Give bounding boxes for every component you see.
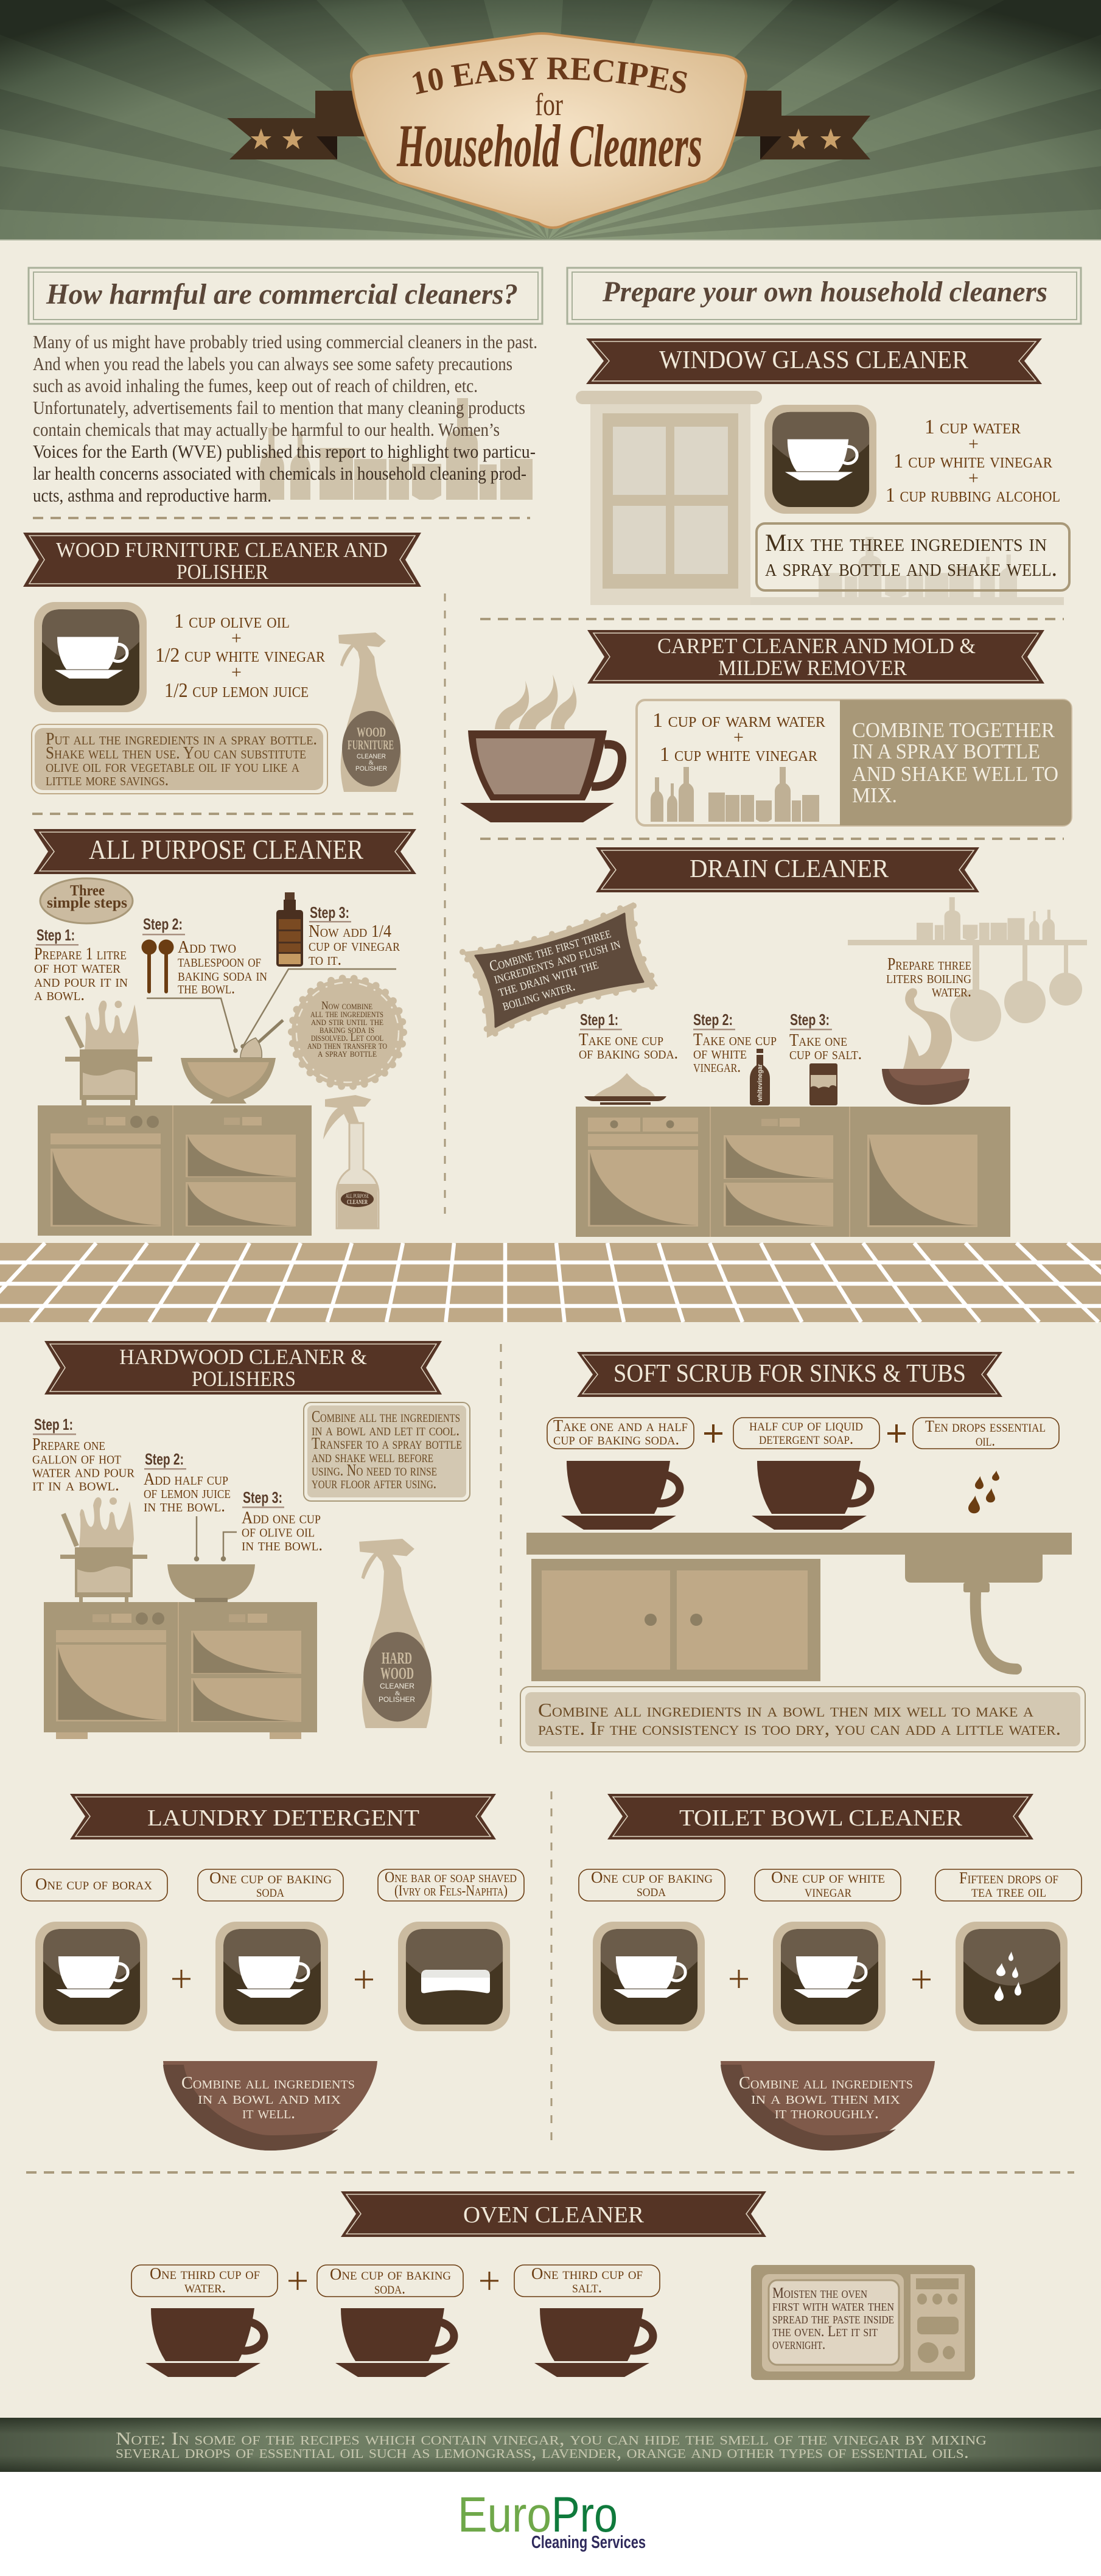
icon: stove (38, 1105, 312, 1236)
icon: cup (34, 602, 147, 712)
icon: spoons (141, 940, 174, 993)
plus sign (730, 1970, 748, 1988)
note box: your floor after using. (312, 1474, 436, 1492)
step 3 text: cup of vinegar (309, 936, 400, 955)
prepare water text: liters boiling (886, 968, 971, 987)
step 3 text: Add one cup (242, 1508, 321, 1528)
ingredient pill: borax (21, 1869, 167, 1901)
illustration: microwave with note: spread the paste inside (772, 2311, 894, 2327)
icon: wood spray bottle: & (369, 760, 374, 766)
ingredient pill 3 (913, 1417, 1059, 1449)
ingredient and method box: AND SHAKE WELL TO (852, 762, 1058, 786)
step 2 text: Take one cup (693, 1031, 777, 1049)
note box: Transfer to a spray bottle (312, 1434, 462, 1452)
banner: laundry: LAUNDRY DETERGENT (147, 1805, 419, 1831)
doily note: and then transfer to (307, 1039, 387, 1052)
icon: cup (215, 1922, 328, 2031)
step 3 text (789, 1010, 862, 1063)
icon: wood spray bottle: FURNITURE (348, 737, 394, 752)
illustration: vinegar bottle (750, 1049, 770, 1105)
icon: cup (764, 405, 876, 514)
prepare water text (886, 955, 971, 1001)
prepare water text: Prepare three (887, 955, 971, 974)
ingredients list: + (231, 628, 242, 648)
illustration: salt jar (809, 1063, 837, 1105)
step 2 text: Add half cup (144, 1470, 228, 1489)
plus sign (704, 1424, 722, 1443)
ingredients list: 1 cup rubbing alcohol (886, 484, 1060, 506)
banner: hardwood: POLISHERS (192, 1367, 296, 1391)
step 3 text: of olive oil (242, 1522, 315, 1541)
icon: hardwood spray bottle: POLISHER (379, 1695, 415, 1704)
step 1 text: of baking soda. (579, 1044, 678, 1063)
step 2 text (693, 1010, 777, 1076)
step 2 text: Step 2: (143, 915, 183, 933)
pointer lines (195, 1516, 237, 1561)
icon: cup (593, 1922, 705, 2031)
step 1 text: gallon of hot (32, 1449, 121, 1468)
ingredient pill: borax: One cup of borax (35, 1875, 152, 1893)
plus sign (480, 2272, 498, 2290)
mixing bowl note: Combine all ingredients (181, 2074, 355, 2093)
ingredient pill: baking soda: One cup of baking (330, 2265, 451, 2283)
icon: cup (752, 1461, 870, 1530)
ingredient pill: water: water. (184, 2278, 226, 2296)
ingredient pill 1 (547, 1416, 694, 1449)
ingredient pill 1: cup of baking soda. (553, 1430, 679, 1448)
step 1 text (34, 926, 128, 1004)
ingredient pill: water: One third cup of (150, 2264, 260, 2283)
illustration: sink and cabinet (526, 1533, 1072, 1681)
panel: drain cleaner (463, 847, 1087, 1237)
note box: and shake well before (312, 1447, 433, 1466)
intro paragraph: And when you read the labels you can always see some safety precautions (33, 353, 512, 374)
white footer background (0, 2472, 1101, 2576)
ingredient pill: baking soda: soda. (374, 2279, 405, 2297)
instruction box (520, 1687, 1085, 1752)
title badge: 10 EASY RECIPES (413, 57, 687, 94)
EuroPro logo: Pro (551, 2487, 618, 2543)
banner: oven (341, 2191, 766, 2237)
panel: wood furniture cleaner (23, 533, 421, 794)
step 2 text: Step 2: (145, 1450, 184, 1468)
icon: oil drops (968, 1471, 999, 1513)
step 3 text: Step 3: (310, 903, 349, 922)
ingredient and method box: COMBINE TOGETHER (852, 718, 1055, 742)
ingredients list: + (968, 468, 979, 488)
illustration: shelf with pans (848, 897, 1087, 1041)
panel: toilet bowl cleaner (579, 1794, 1082, 2151)
EuroPro logo: Cleaning Services (531, 2533, 646, 2552)
icon: hardwood spray bottle: HARD (382, 1649, 412, 1667)
step 1 text: Prepare 1 litre (34, 945, 127, 964)
illustration: kitchen counter (576, 1107, 1010, 1237)
ingredient pill: baking soda: One cup of baking (591, 1868, 713, 1886)
ingredient pill: tea tree oil: Fifteen drops of (959, 1869, 1058, 1887)
icon: cup (335, 2308, 454, 2377)
icon: cup (773, 1922, 886, 2031)
plus sign (887, 1424, 906, 1443)
wavy plaque note: the drain with the (496, 956, 600, 1000)
ingredient pill 3: Ten drops essential (925, 1417, 1046, 1435)
intro paragraph: ucts, asthma and reproductive harm. (33, 485, 271, 506)
instruction box: a spray bottle and shake well. (765, 554, 1057, 581)
heading: prepare your own: Prepare your own household cleaners (602, 276, 1047, 308)
note box: using. No need to rinse (312, 1461, 437, 1479)
note box: olive oil for vegetable oil if you like a (46, 757, 299, 776)
illustration: microwave with note: first with water then (772, 2298, 894, 2314)
doily note: baking soda is (320, 1023, 374, 1036)
doily note: a spray bottle (318, 1047, 377, 1060)
ingredient pill: vinegar (755, 1868, 901, 1901)
footer note band (0, 2418, 1101, 2472)
ingredient pill: baking soda (317, 2265, 463, 2297)
illustration: window and shelf (576, 391, 1064, 605)
mixing bowl note: in a bowl and mix (198, 2089, 341, 2108)
step 2 text: of lemon juice (144, 1483, 231, 1502)
step 2 text: the bowl. (178, 979, 235, 998)
badge: three simple steps (40, 878, 133, 923)
step 1 text: it in a bowl. (32, 1475, 119, 1495)
ingredients list (155, 610, 325, 702)
icon: stove (44, 1602, 317, 1739)
note box (32, 724, 327, 794)
illustration: steaming cup (460, 674, 622, 822)
ingredient pill: soap: (Ivry or Fels-Naphta) (394, 1883, 508, 1899)
mixing bowl note: it well. (242, 2104, 295, 2123)
step 1 text: Prepare one (32, 1435, 105, 1454)
doily note: dissolved. Let cool (311, 1031, 383, 1044)
illustration: baking soda plate (584, 1073, 666, 1105)
header sunburst (0, 0, 1101, 240)
banner: carpet: CARPET CLEANER AND MOLD & (657, 634, 976, 658)
ingredients list: 1/2 cup lemon juice (164, 679, 309, 702)
banner: carpet: MILDEW REMOVER (718, 656, 907, 680)
ingredient pill: tea tree oil: tea tree oil (971, 1882, 1046, 1900)
mixing bowl note: it thoroughly. (775, 2104, 879, 2123)
step 2 text (142, 915, 267, 998)
intro paragraph: Many of us might have probably tried using commercial cleaners in the past. (33, 331, 537, 352)
pointer lines (147, 969, 396, 1052)
intro paragraph: contain chemicals that may actually be harmful to our health. Women’s (33, 419, 500, 440)
panel: hardwood cleaner (32, 1341, 470, 1739)
icon: boiling pot (65, 1001, 152, 1105)
icon: soap bar (398, 1922, 510, 2031)
banner: drain (596, 847, 979, 892)
step 1 text (579, 1010, 678, 1063)
mixing bowl note (163, 2061, 377, 2151)
illustration: microwave with note: overnight. (772, 2336, 825, 2353)
icon: mixing bowl and whisk (181, 1020, 283, 1104)
step 2 text (144, 1450, 231, 1516)
step 3 text: Step 3: (790, 1010, 830, 1029)
ingredient pill: soap (378, 1869, 524, 1901)
banner: soft scrub: SOFT SCRUB FOR SINKS & TUBS (613, 1360, 966, 1388)
note box: in a bowl and let it cool. (312, 1421, 460, 1439)
step 1 text: Take one cup (579, 1031, 663, 1049)
banner: soft scrub (577, 1352, 1002, 1397)
intro paragraph: lar health concerns associated with chemicals in household cleaning prod- (33, 463, 526, 484)
step 2 text: vinegar. (693, 1057, 741, 1076)
step 1 text: Step 1: (580, 1010, 618, 1029)
plus sign (288, 2272, 307, 2290)
banner: all purpose (33, 829, 416, 874)
icon: hardwood spray bottle: CLEANER (380, 1682, 414, 1690)
icon: cup (145, 2308, 264, 2377)
plus sign (355, 1970, 373, 1989)
icon: boiling pot (60, 1497, 147, 1602)
icon: cup (35, 1922, 147, 2031)
step 2 text: in the bowl. (144, 1497, 225, 1516)
ingredient pill: vinegar: One cup of white (771, 1868, 885, 1886)
badge: three simple steps: Three (70, 883, 105, 899)
note box: Shake well then use. You can substitute (46, 744, 306, 763)
icon: wood spray bottle: WOOD (357, 724, 386, 740)
step 1 text: water and pour (32, 1462, 135, 1482)
note box (304, 1402, 470, 1501)
ingredient pill 2 (733, 1416, 879, 1449)
doily note: and stir until the (311, 1015, 383, 1028)
ingredient pill: salt: salt. (572, 2278, 602, 2296)
ingredient and method box (637, 700, 1071, 825)
icon: all purpose spray bottle: ALL PURPOSE (346, 1193, 369, 1199)
step 3 text: cup of salt. (789, 1045, 862, 1063)
note box: Put all the ingredients in a spray bottle. (46, 730, 317, 749)
step 3 text: in the bowl. (242, 1536, 323, 1555)
note box: little more savings. (46, 771, 169, 789)
panel: window glass cleaner (576, 338, 1069, 605)
mixing bowl note: in a bowl then mix (751, 2089, 901, 2108)
panel: soft scrub (520, 1352, 1085, 1752)
wavy plaque note: Combine the first three (488, 925, 613, 975)
banner: laundry (70, 1794, 496, 1839)
wavy plaque note: ingredients and flush in (492, 936, 622, 987)
ingredient pill 2: half cup of liquid (749, 1416, 863, 1434)
intro paragraph: Unfortunately, advertisements fail to mention that many cleaning products (33, 397, 525, 418)
ingredient pill: baking soda (579, 1868, 725, 1901)
icon: drops (956, 1922, 1068, 2031)
banner: toilet (607, 1794, 1033, 1839)
icon: wood spray bottle: POLISHER (355, 765, 387, 772)
intro paragraph: such as avoid inhaling the fumes, keep out of reach of children, etc. (33, 375, 478, 396)
instruction box: paste. If the consistency is too dry, you can add a little water. (538, 1717, 1061, 1739)
doily note (292, 978, 404, 1087)
step 2 text: Add two (178, 938, 236, 957)
ingredient pill: baking soda: One cup of baking (209, 1869, 332, 1887)
ingredients list (886, 416, 1060, 506)
step 1 text: and pour it in (34, 972, 128, 991)
title badge (350, 32, 747, 229)
intro paragraph (33, 331, 537, 506)
panel: oven cleaner (131, 2191, 975, 2380)
footer note band: several drops of essential oil such as lemongrass, lavender, orange and other types of essential oils. (116, 2442, 969, 2462)
footer note band: Note: In some of the recipes which contain vinegar, you can hide the smell of the vinegar by mixing (116, 2429, 987, 2449)
step 3 text: to it. (309, 950, 341, 969)
bottles behind paragraph (260, 398, 533, 500)
ingredient and method box: MIX. (852, 783, 897, 807)
ingredient pill: water (131, 2264, 278, 2297)
ingredients list: 1 cup white vinegar (893, 450, 1052, 472)
banner: window glass (586, 338, 1042, 384)
banner: wood furniture: POLISHER (177, 560, 269, 584)
icon: cup (561, 1461, 680, 1530)
icon: hardwood spray bottle (359, 1539, 432, 1728)
illustration: microwave with note: the oven. Let it sit (772, 2323, 878, 2340)
illustration: microwave with note (751, 2265, 975, 2380)
prepare water text: water. (932, 982, 971, 1001)
ingredients list: 1 cup water (924, 416, 1021, 438)
mixing bowl note: Combine all ingredients (739, 2074, 913, 2093)
step 2 text: of white (693, 1044, 747, 1063)
step 2 text: tablespoon of (178, 952, 261, 971)
wavy plaque note (463, 902, 658, 1038)
icon: hardwood spray bottle: WOOD (380, 1664, 414, 1682)
title badge: for (535, 88, 563, 122)
step 1 text: Step 1: (34, 1415, 73, 1433)
heading: how harmful (29, 268, 542, 324)
step 3 text: Take one (789, 1031, 847, 1050)
banner: all purpose: ALL PURPOSE CLEANER (89, 835, 363, 865)
panel: laundry detergent (21, 1794, 524, 2151)
step 3 text (242, 1488, 323, 1555)
ingredient pill 2: detergent soap. (759, 1429, 853, 1447)
doily note: Now combine (321, 999, 372, 1012)
step 3 text: Now add 1/4 (309, 922, 391, 941)
ingredients list: + (231, 662, 242, 682)
banner: wood furniture (23, 533, 421, 587)
instruction box: Combine all ingredients in a bowl then mix well to make a (538, 1699, 1033, 1721)
note box: Combine all the ingredients (312, 1407, 460, 1426)
ingredient and method box: 1 cup of warm water (652, 709, 825, 732)
ingredient and method box: IN A SPRAY BOTTLE (852, 740, 1040, 763)
icon: bowl (167, 1564, 255, 1602)
ingredient and method box: + (733, 727, 744, 747)
ingredients list: + (968, 434, 979, 454)
banner: hardwood: HARDWOOD CLEANER & (119, 1345, 367, 1369)
banner: drain: DRAIN CLEANER (690, 855, 889, 883)
illustration: microwave with note: Moisten the oven (772, 2285, 867, 2301)
ingredient pill: baking soda: soda (256, 1882, 284, 1900)
panel: all purpose cleaner (33, 829, 416, 1236)
step 1 text: of hot water (34, 958, 121, 977)
illustration: steaming bowl (882, 988, 970, 1105)
step 3 text: Step 3: (243, 1488, 282, 1507)
icon: vinegar bottle (276, 892, 303, 967)
banner: window glass: WINDOW GLASS CLEANER (659, 346, 968, 374)
badge: three simple steps: simple steps (47, 895, 127, 911)
ingredient pill: salt: One third cup of (531, 2264, 643, 2283)
heading: how harmful: How harmful are commercial cleaners? (46, 278, 518, 310)
icon: wood spray bottle (338, 632, 401, 792)
mixing bowl note (721, 2061, 935, 2151)
banner: carpet (587, 630, 1044, 684)
EuroPro logo: Euro (458, 2487, 551, 2543)
ingredient pill: salt (514, 2264, 660, 2297)
heading: prepare your own (567, 268, 1081, 324)
ingredients list: 1/2 cup white vinegar (155, 644, 325, 667)
banner: oven: OVEN CLEANER (463, 2202, 645, 2228)
doily note: all the ingredients (310, 1007, 383, 1020)
panel: carpet cleaner (460, 630, 1071, 825)
icon: all purpose spray bottle (323, 1095, 379, 1228)
icon: all purpose spray bottle: CLEANER (347, 1199, 368, 1206)
banner: wood furniture: WOOD FURNITURE CLEANER AND (56, 538, 388, 562)
intro paragraph: Voices for the Earth (WVE) published this report to highlight two particu- (33, 441, 536, 462)
plus sign (172, 1970, 190, 1988)
ingredient pill: soap: One bar of soap shaved (385, 1869, 517, 1886)
title ribbon (227, 91, 870, 159)
ingredient pill 3: oil. (976, 1431, 995, 1449)
plus sign (912, 1970, 931, 1989)
step 1 text (32, 1415, 135, 1495)
instruction box: Mix the three ingredients in (765, 529, 1047, 556)
ingredient pill 1: Take one and a half (553, 1416, 688, 1435)
ingredient pill: baking soda (198, 1869, 343, 1901)
banner: toilet: TOILET BOWL CLEANER (679, 1805, 963, 1831)
ingredient pill: vinegar: vinegar (805, 1882, 851, 1900)
tiled floor band (0, 1243, 1101, 1322)
step 3 text (309, 903, 400, 969)
title badge: Household Cleaners (396, 112, 702, 180)
icon: hardwood spray bottle: & (395, 1690, 400, 1697)
ingredients list: 1 cup olive oil (174, 610, 290, 632)
step 1 text: Step 1: (37, 926, 75, 944)
illustration: vinegar bottle: whitevinegar (757, 1063, 764, 1102)
icon: wood spray bottle: CLEANER (357, 753, 386, 760)
step 1 text: a bowl. (34, 985, 85, 1004)
instruction box (757, 523, 1069, 590)
step 2 text: baking soda in (178, 966, 267, 985)
ingredient pill: tea tree oil (935, 1869, 1082, 1901)
ingredient pill: baking soda: soda (637, 1881, 666, 1900)
wavy plaque note: boiling water. (500, 978, 577, 1014)
ingredient and method box: 1 cup white vinegar (660, 743, 817, 766)
EuroPro logo (458, 2487, 646, 2552)
icon: cup (534, 2308, 653, 2377)
step 2 text: Step 2: (693, 1010, 733, 1029)
banner: hardwood (44, 1341, 442, 1395)
